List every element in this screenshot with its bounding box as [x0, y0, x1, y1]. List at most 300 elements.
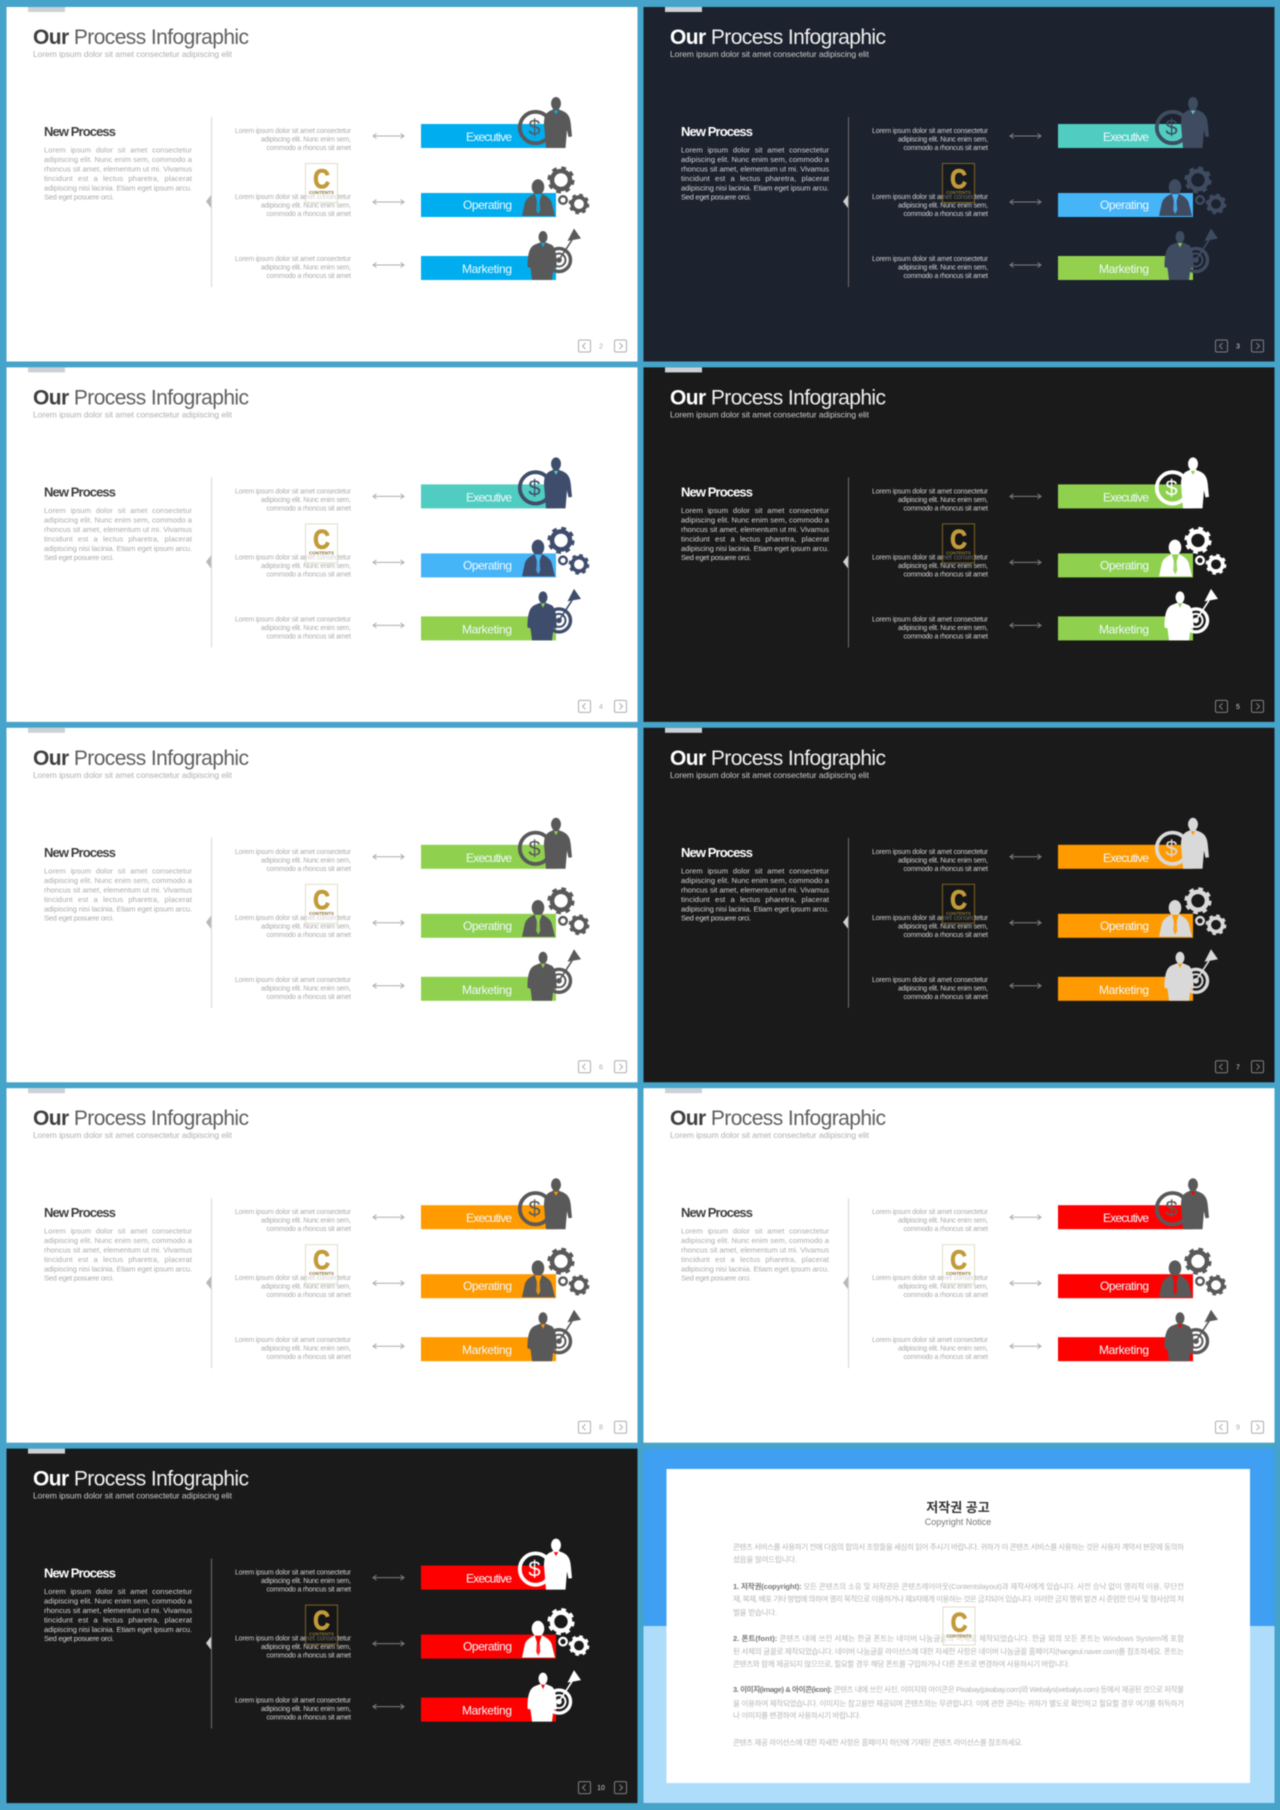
row: marketing: adipiscing elit. Nunc enim sem, [261, 1706, 351, 1713]
watermark logo: CONTENTS [946, 911, 971, 916]
row: marketing [235, 949, 581, 1001]
row: executive [872, 818, 1209, 873]
watermark logo: C [950, 885, 967, 915]
row: operating: commodo a rhoncus sit amet [904, 571, 988, 578]
notice body text [733, 1542, 1184, 1747]
body text: rhoncus sit amet, elementum ut mi. Vivamus [44, 164, 192, 174]
row: marketing: commodo a rhoncus sit amet [266, 1354, 351, 1361]
body text: Sed eget posuere orci. [681, 192, 751, 202]
watermark logo [306, 1605, 338, 1644]
notice body text: 콘텐츠 서비스를 사용하기 전에 다음의 합의서 조항들을 세심히 읽어 주시기 바랍니다. 귀하가 이 콘텐츠 서비스를 사용하는 것은 사용자 계약서 본문에 동의하 [733, 1542, 1184, 1552]
row: marketing [235, 1670, 581, 1722]
row: executive: Lorem ipsum dolor sit amet consectetur [872, 1209, 989, 1216]
watermark logo: C [313, 525, 330, 555]
title: Our Process Infographic [33, 26, 249, 49]
row: marketing: adipiscing elit. Nunc enim sem, [261, 1346, 351, 1353]
notice body text: 나 이미지를 변경하여 사용하시기 바랍니다. [733, 1710, 861, 1720]
body text: rhoncus sit amet, elementum ut mi. Vivamus [681, 164, 829, 174]
row: marketing: commodo a rhoncus sit amet [266, 994, 351, 1001]
row: marketing: Marketing [1099, 622, 1149, 636]
watermark logo [306, 164, 338, 202]
row: operating: Operating [1100, 198, 1149, 212]
body text: rhoncus sit amet, elementum ut mi. Vivamus [44, 1606, 192, 1615]
body text: Sed eget posuere orci. [44, 1634, 114, 1643]
navigation and page number [578, 340, 626, 352]
title: Our Process Infographic [670, 26, 886, 49]
body text: Sed eget posuere orci. [44, 913, 114, 922]
navigation and page number [578, 1421, 626, 1433]
watermark logo: C [950, 525, 967, 555]
navigation and page number: 4 [599, 704, 603, 711]
body text: Sed eget posuere orci. [44, 1274, 114, 1283]
watermark logo [942, 524, 974, 563]
divider with pointer [206, 1198, 212, 1368]
body text: rhoncus sit amet, elementum ut mi. Vivamus [44, 885, 192, 894]
row: executive [235, 818, 572, 873]
row: operating: adipiscing elit. Nunc enim sem, [261, 202, 351, 210]
notice body text: 을 이용하여 제작되었습니다. 이미지는 참고용만 제공되며 콘텐츠와는 무관합니다. 이에 관한 권리는 귀하가 별도로 확인하고 필요할 경우 여기를 취득하거 [733, 1698, 1184, 1708]
notice body text: 콘텐츠 제공 라이선스에 대한 자세한 사항은 홈페이지 하단에 기재된 콘텐츠 라이선스를 참조하세요. [733, 1737, 1023, 1747]
slide 3: navy with teal, blue, green bars [644, 7, 1274, 362]
row: marketing [872, 589, 1218, 640]
body text: adipiscing nisi lacinia. Etiam eget ipsum arcu. [44, 1265, 192, 1274]
notice body text: 된 서체의 글꼴로 제작되었습니다. 네이버 나눔글꼴 라이선스에 대한 자세한 사항은 네이버 나눔글꼴 홈페이지(hangeul.naver.com)를 참조하세요. 폰트는 [733, 1646, 1184, 1656]
row: marketing: adipiscing elit. Nunc enim sem, [898, 985, 988, 992]
row: operating: Lorem ipsum dolor sit amet consectetur [872, 915, 989, 922]
row: marketing: Lorem ipsum dolor sit amet consectetur [235, 977, 352, 984]
body text: adipiscing nisi lacinia. Etiam eget ipsum arcu. [44, 1625, 192, 1634]
body text: adipiscing nisi lacinia. Etiam eget ipsum arcu. [44, 904, 192, 913]
row: executive: adipiscing elit. Nunc enim sem, [261, 857, 351, 864]
row: operating [235, 889, 588, 939]
row: executive: Lorem ipsum dolor sit amet consectetur [872, 128, 989, 135]
notice body text: 셨음을 알려드립니다. [733, 1554, 797, 1564]
row: executive: Lorem ipsum dolor sit amet consectetur [235, 1570, 352, 1577]
row: marketing: Marketing [462, 1343, 512, 1357]
row: executive: commodo a rhoncus sit amet [904, 1226, 988, 1233]
row: executive: Executive [466, 1211, 512, 1225]
row: operating: Lorem ipsum dolor sit amet consectetur [872, 194, 989, 201]
row: executive: Executive [466, 1572, 512, 1586]
row: operating: Operating [463, 198, 512, 212]
body text: adipiscing nisi lacinia. Etiam eget ipsum arcu. [44, 544, 192, 553]
row: marketing: Lorem ipsum dolor sit amet consectetur [872, 616, 989, 623]
row: marketing: commodo a rhoncus sit amet [266, 1715, 351, 1722]
row: marketing: Marketing [462, 622, 512, 636]
body text [44, 1587, 193, 1643]
row: marketing: Marketing [1099, 1343, 1149, 1357]
body text: Lorem ipsum dolor sit amet consectetur [44, 146, 192, 154]
watermark logo: CONTENTS [309, 550, 334, 555]
row: executive: Executive [1103, 490, 1149, 504]
slide 7: black with orange bars and light icons [644, 728, 1274, 1082]
subtitle: Lorem ipsum dolor sit amet consectetur adipiscing elit [33, 1491, 233, 1501]
body text [681, 866, 830, 922]
row: marketing: adipiscing elit. Nunc enim sem, [898, 625, 988, 632]
watermark logo: CONTENTS [946, 1634, 972, 1638]
navigation and page number: 6 [599, 1064, 603, 1071]
row: executive [872, 97, 1209, 152]
watermark logo: CONTENTS [946, 1271, 971, 1276]
watermark logo: C [313, 1606, 330, 1636]
title: Our Process Infographic [670, 1107, 886, 1130]
heading: new process: New Process [681, 484, 753, 499]
row: executive: Executive [466, 851, 512, 865]
heading: new process: New Process [681, 124, 753, 139]
slide 10: black with red bars and white icons [6, 1449, 638, 1803]
row: operating: Operating [463, 919, 512, 933]
body text [681, 506, 830, 562]
row: executive: adipiscing elit. Nunc enim sem, [261, 1578, 351, 1585]
row: operating [235, 1610, 588, 1660]
row: operating: commodo a rhoncus sit amet [266, 1292, 351, 1299]
row: operating: Lorem ipsum dolor sit amet consectetur [235, 194, 352, 201]
row: operating: Lorem ipsum dolor sit amet consectetur [235, 1636, 352, 1643]
body text [681, 1227, 830, 1283]
row: operating: Lorem ipsum dolor sit amet consectetur [235, 915, 352, 922]
divider with pointer [206, 838, 212, 1008]
watermark logo [942, 884, 974, 923]
navigation and page number: 7 [1236, 1064, 1240, 1071]
row: operating: commodo a rhoncus sit amet [904, 211, 988, 218]
row: operating: Lorem ipsum dolor sit amet consectetur [235, 554, 352, 561]
divider with pointer [843, 477, 849, 647]
row: operating: commodo a rhoncus sit amet [904, 932, 988, 939]
body text: Sed eget posuere orci. [681, 1274, 751, 1283]
row: executive: adipiscing elit. Nunc enim sem, [261, 1218, 351, 1225]
heading: new process: New Process [681, 845, 753, 860]
heading: new process: New Process [681, 1205, 753, 1220]
notice body text: 3. 이미지(image) & 아이콘(icon): 콘텐츠 내에 쓰인 사진, 이미지와 아이콘은 Pixabay(pixabay.com)와 Webalys(webalys.com) 등에서 제공된 것으로 저작물 [733, 1684, 1184, 1694]
body text: rhoncus sit amet, elementum ut mi. Vivamus [44, 525, 192, 534]
notice body text: 콘텐츠와 함께 제공되지 않으므로, 필요할 경우 해당 폰트를 구입하거나 다른 폰트로 변경하여 사용하시기 바랍니다. [733, 1658, 1070, 1668]
row: marketing [235, 228, 581, 280]
slide 5: black with green bars and white icons [644, 367, 1274, 722]
body text: tincidunt est a lectus pharetra, placerat [44, 1616, 193, 1625]
body text: adipiscing elit. Nunc enim sem, commodo a [681, 1236, 830, 1245]
row: executive [872, 457, 1209, 512]
body text: adipiscing elit. Nunc enim sem, commodo a [44, 515, 193, 524]
watermark logo: C [313, 885, 330, 915]
row: marketing [235, 1310, 581, 1361]
body text: Lorem ipsum dolor sit amet consectetur [44, 506, 192, 515]
row: operating: adipiscing elit. Nunc enim sem, [898, 563, 988, 570]
title: Our Process Infographic [33, 747, 249, 770]
row: marketing: Marketing [1099, 983, 1149, 997]
row: marketing: commodo a rhoncus sit amet [904, 994, 988, 1001]
row: executive: $ [528, 1196, 541, 1221]
row: executive: adipiscing elit. Nunc enim sem, [898, 1218, 988, 1225]
row: marketing: commodo a rhoncus sit amet [266, 633, 351, 640]
row: executive: adipiscing elit. Nunc enim sem, [261, 136, 351, 144]
watermark logo: CONTENTS [309, 1632, 334, 1637]
watermark logo: CONTENTS [946, 550, 971, 555]
body text: Sed eget posuere orci. [44, 553, 114, 562]
row: executive: commodo a rhoncus sit amet [266, 1226, 351, 1233]
body text [44, 146, 193, 202]
watermark logo [943, 1607, 975, 1645]
row: executive: $ [1165, 836, 1178, 861]
navigation and page number [578, 700, 626, 712]
row: executive: $ [1165, 1196, 1178, 1221]
row: marketing: adipiscing elit. Nunc enim sem, [898, 264, 988, 272]
row: executive: adipiscing elit. Nunc enim sem, [898, 136, 988, 144]
watermark logo [306, 1245, 338, 1284]
navigation and page number [1216, 700, 1264, 712]
row: executive: Executive [1103, 130, 1149, 144]
row: operating: commodo a rhoncus sit amet [266, 571, 351, 578]
title: Our Process Infographic [33, 1107, 249, 1130]
row: executive [872, 1178, 1209, 1233]
navigation and page number [1216, 1421, 1264, 1433]
row: executive: $ [528, 1557, 541, 1582]
row: executive: commodo a rhoncus sit amet [904, 866, 988, 873]
watermark logo: C [313, 164, 330, 194]
row: marketing: Lorem ipsum dolor sit amet consectetur [872, 1337, 989, 1344]
body text: rhoncus sit amet, elementum ut mi. Vivamus [44, 1246, 192, 1255]
row: executive [235, 1178, 572, 1233]
body text: adipiscing elit. Nunc enim sem, commodo a [681, 155, 830, 164]
row: executive [235, 1539, 572, 1594]
subtitle: Lorem ipsum dolor sit amet consectetur adipiscing elit [670, 409, 870, 419]
body text: Lorem ipsum dolor sit amet consectetur [44, 1587, 192, 1596]
heading: new process: New Process [44, 1205, 116, 1220]
body text: adipiscing nisi lacinia. Etiam eget ipsum arcu. [681, 544, 829, 553]
row: marketing: Lorem ipsum dolor sit amet consectetur [872, 977, 989, 984]
body text: rhoncus sit amet, elementum ut mi. Vivamus [681, 885, 829, 894]
navigation and page number: 2 [599, 344, 603, 350]
body text: adipiscing nisi lacinia. Etiam eget ipsum arcu. [44, 184, 192, 192]
row: executive: commodo a rhoncus sit amet [904, 505, 988, 512]
body text: Sed eget posuere orci. [44, 192, 114, 202]
body text: tincidunt est a lectus pharetra, placerat [681, 1255, 830, 1264]
navigation and page number [1216, 340, 1264, 352]
row: executive [235, 457, 572, 512]
body text [681, 146, 830, 202]
body text: adipiscing elit. Nunc enim sem, commodo a [44, 876, 193, 885]
body text: adipiscing elit. Nunc enim sem, commodo a [681, 876, 830, 885]
body text: Sed eget posuere orci. [681, 553, 751, 562]
body text: Lorem ipsum dolor sit amet consectetur [681, 506, 829, 515]
watermark logo [306, 524, 338, 563]
navigation and page number [578, 1782, 626, 1794]
body text: Lorem ipsum dolor sit amet consectetur [44, 866, 192, 875]
divider with pointer [843, 1198, 849, 1368]
row: operating: commodo a rhoncus sit amet [266, 932, 351, 939]
watermark logo: C [951, 1608, 967, 1638]
row: executive: commodo a rhoncus sit amet [266, 1587, 351, 1594]
heading: new process: New Process [44, 845, 116, 860]
body text [44, 506, 193, 562]
watermark logo [942, 1245, 974, 1284]
row: marketing [872, 1310, 1218, 1361]
row: marketing: Marketing [462, 262, 512, 276]
divider with pointer [206, 477, 212, 647]
watermark logo: CONTENTS [309, 1271, 334, 1276]
row: operating: Lorem ipsum dolor sit amet consectetur [235, 1275, 352, 1282]
row: marketing [235, 589, 581, 640]
row: executive: adipiscing elit. Nunc enim sem, [261, 497, 351, 504]
row: operating: adipiscing elit. Nunc enim sem, [898, 923, 988, 930]
row: executive: Lorem ipsum dolor sit amet consectetur [235, 849, 352, 856]
subtitle: Lorem ipsum dolor sit amet consectetur adipiscing elit [33, 49, 233, 59]
row: operating [235, 528, 588, 578]
row: marketing [872, 949, 1218, 1001]
navigation and page number: 9 [1236, 1425, 1240, 1432]
slide 11: copyright notice [644, 1448, 1274, 1803]
row: executive: Executive [466, 130, 512, 144]
heading: new process: New Process [44, 1566, 116, 1581]
body text: Lorem ipsum dolor sit amet consectetur [681, 1227, 829, 1236]
body text: tincidunt est a lectus pharetra, placerat [44, 1255, 193, 1264]
row: operating [872, 528, 1225, 578]
row: operating: commodo a rhoncus sit amet [266, 1653, 351, 1660]
body text: adipiscing elit. Nunc enim sem, commodo a [44, 1236, 193, 1245]
row: operating [872, 168, 1225, 218]
row: operating: adipiscing elit. Nunc enim sem, [261, 563, 351, 570]
row: executive [235, 97, 572, 152]
watermark logo: C [313, 1245, 330, 1276]
row: marketing: adipiscing elit. Nunc enim sem, [261, 985, 351, 992]
row: executive: Lorem ipsum dolor sit amet consectetur [235, 488, 352, 495]
row: executive: Executive [1103, 1211, 1149, 1225]
body text: Lorem ipsum dolor sit amet consectetur [681, 146, 829, 154]
row: marketing: commodo a rhoncus sit amet [904, 633, 988, 640]
row: operating: adipiscing elit. Nunc enim sem, [898, 1284, 988, 1291]
navigation and page number: 8 [599, 1425, 603, 1432]
row: executive: $ [528, 475, 541, 500]
subtitle: Lorem ipsum dolor sit amet consectetur adipiscing elit [670, 770, 870, 780]
row: marketing: Lorem ipsum dolor sit amet consectetur [872, 256, 989, 263]
row: marketing: commodo a rhoncus sit amet [904, 1354, 988, 1361]
watermark logo: CONTENTS [309, 911, 334, 916]
row: marketing: Lorem ipsum dolor sit amet consectetur [235, 256, 352, 263]
body text: tincidunt est a lectus pharetra, placerat [681, 534, 830, 543]
slide 4: white with teal, blue, green bars [6, 367, 638, 722]
row: operating: Lorem ipsum dolor sit amet consectetur [872, 1275, 989, 1282]
row: operating: commodo a rhoncus sit amet [904, 1292, 988, 1299]
navigation and page number [1216, 1061, 1264, 1073]
body text [44, 866, 193, 922]
divider with pointer [206, 117, 212, 287]
notice body text: 1. 저작권(copyright): 모든 콘텐츠의 소유 및 저작권은 콘텐츠레이아웃(Contentslayout)과 제작사에게 있습니다. 사전 승낙 없이 영리적 이용, 무단전 [733, 1581, 1184, 1591]
row: operating [235, 168, 588, 218]
watermark logo: C [950, 164, 967, 194]
heading: new process: New Process [44, 124, 116, 139]
title: Our Process Infographic [670, 747, 886, 770]
row: operating: Lorem ipsum dolor sit amet consectetur [872, 554, 989, 561]
row: operating [872, 889, 1225, 939]
divider with pointer [843, 117, 849, 287]
body text: rhoncus sit amet, elementum ut mi. Vivamus [681, 525, 829, 534]
navigation and page number: 10 [597, 1785, 605, 1792]
body text: Lorem ipsum dolor sit amet consectetur [44, 1227, 192, 1236]
row: operating: Operating [1100, 919, 1149, 933]
navigation and page number: 3 [1236, 344, 1240, 350]
subtitle: Lorem ipsum dolor sit amet consectetur adipiscing elit [670, 49, 870, 59]
row: marketing: adipiscing elit. Nunc enim sem, [898, 1346, 988, 1353]
row: marketing: Marketing [462, 983, 512, 997]
body text: adipiscing nisi lacinia. Etiam eget ipsum arcu. [681, 904, 829, 913]
row: marketing: Marketing [1099, 262, 1149, 276]
body text: Sed eget posuere orci. [681, 913, 751, 922]
row: marketing: Lorem ipsum dolor sit amet consectetur [235, 1337, 352, 1344]
slide 2: white with blue bars [6, 7, 638, 362]
notice subheading: Copyright Notice [925, 1517, 991, 1527]
divider with pointer [843, 838, 849, 1008]
row: operating [872, 1249, 1225, 1299]
body text: adipiscing elit. Nunc enim sem, commodo a [681, 515, 830, 524]
row: executive: $ [1165, 475, 1178, 500]
row: executive: Lorem ipsum dolor sit amet consectetur [235, 1209, 352, 1216]
body text: Lorem ipsum dolor sit amet consectetur [681, 866, 829, 875]
row: marketing: adipiscing elit. Nunc enim sem, [261, 264, 351, 272]
title: Our Process Infographic [670, 386, 886, 409]
watermark logo [942, 164, 974, 202]
row: operating: adipiscing elit. Nunc enim sem, [261, 1284, 351, 1291]
row: marketing: commodo a rhoncus sit amet [904, 273, 988, 280]
subtitle: Lorem ipsum dolor sit amet consectetur adipiscing elit [670, 1130, 870, 1140]
row: executive: commodo a rhoncus sit amet [904, 145, 988, 152]
slide 6: white with green bars [6, 728, 638, 1082]
body text: tincidunt est a lectus pharetra, placerat [44, 534, 193, 543]
title: Our Process Infographic [33, 386, 249, 409]
white notice panel [666, 1469, 1250, 1783]
row: operating: adipiscing elit. Nunc enim sem, [898, 202, 988, 210]
row: executive: commodo a rhoncus sit amet [266, 866, 351, 873]
title: Our Process Infographic [33, 1468, 249, 1491]
notice body text: 2. 폰트(font): 콘텐츠 내에 쓰인 서체는 한글 폰트는 네이버 나눔글꼴의 서체로 제작되었습니다. 한글 외의 모든 폰트는 Windows System에 포함 [733, 1633, 1184, 1643]
row: operating: adipiscing elit. Nunc enim sem, [261, 923, 351, 930]
body text: adipiscing elit. Nunc enim sem, commodo a [44, 1597, 193, 1606]
row: marketing: commodo a rhoncus sit amet [266, 273, 351, 280]
row: executive: $ [528, 836, 541, 861]
body text: tincidunt est a lectus pharetra, placerat [681, 174, 830, 183]
watermark logo: CONTENTS [946, 190, 971, 195]
slide 9: white with red bars [644, 1088, 1274, 1443]
row: executive: Lorem ipsum dolor sit amet consectetur [235, 128, 352, 135]
body text: rhoncus sit amet, elementum ut mi. Vivamus [681, 1246, 829, 1255]
row: marketing: adipiscing elit. Nunc enim sem, [261, 625, 351, 632]
row: marketing: Lorem ipsum dolor sit amet consectetur [235, 616, 352, 623]
navigation and page number [578, 1061, 626, 1073]
navigation and page number: 5 [1236, 704, 1240, 711]
row: executive: commodo a rhoncus sit amet [266, 505, 351, 512]
body text: adipiscing nisi lacinia. Etiam eget ipsum arcu. [681, 184, 829, 192]
row: executive: Lorem ipsum dolor sit amet consectetur [872, 849, 989, 856]
row: operating: Operating [463, 1640, 512, 1654]
row: marketing: Lorem ipsum dolor sit amet consectetur [235, 1698, 352, 1705]
row: executive: Executive [1103, 851, 1149, 865]
notice heading: 저작권 공고 [926, 1500, 990, 1515]
body text: adipiscing elit. Nunc enim sem, commodo a [44, 155, 193, 164]
row: marketing: Marketing [462, 1704, 512, 1718]
watermark logo [306, 884, 338, 923]
notice body text: 재, 복제, 배포 기타 방법에 의하여 영리 목적으로 이용하거나 제3자에게 이용하는 것은 금지되어 있습니다. 이러한 금지 행위 발견 시 준엄한 민사 및 형사상의 처 [733, 1594, 1184, 1604]
subtitle: Lorem ipsum dolor sit amet consectetur adipiscing elit [33, 409, 233, 419]
row: executive: Executive [466, 490, 512, 504]
row: operating: Operating [463, 1279, 512, 1293]
row: executive: Lorem ipsum dolor sit amet consectetur [872, 488, 989, 495]
body text: tincidunt est a lectus pharetra, placerat [681, 895, 830, 904]
subtitle: Lorem ipsum dolor sit amet consectetur adipiscing elit [33, 770, 233, 780]
watermark logo: CONTENTS [309, 190, 334, 195]
subtitle: Lorem ipsum dolor sit amet consectetur adipiscing elit [33, 1130, 233, 1140]
row: executive: adipiscing elit. Nunc enim sem, [898, 497, 988, 504]
body text: tincidunt est a lectus pharetra, placerat [44, 895, 193, 904]
watermark logo: C [950, 1245, 967, 1276]
row: operating: commodo a rhoncus sit amet [266, 211, 351, 218]
